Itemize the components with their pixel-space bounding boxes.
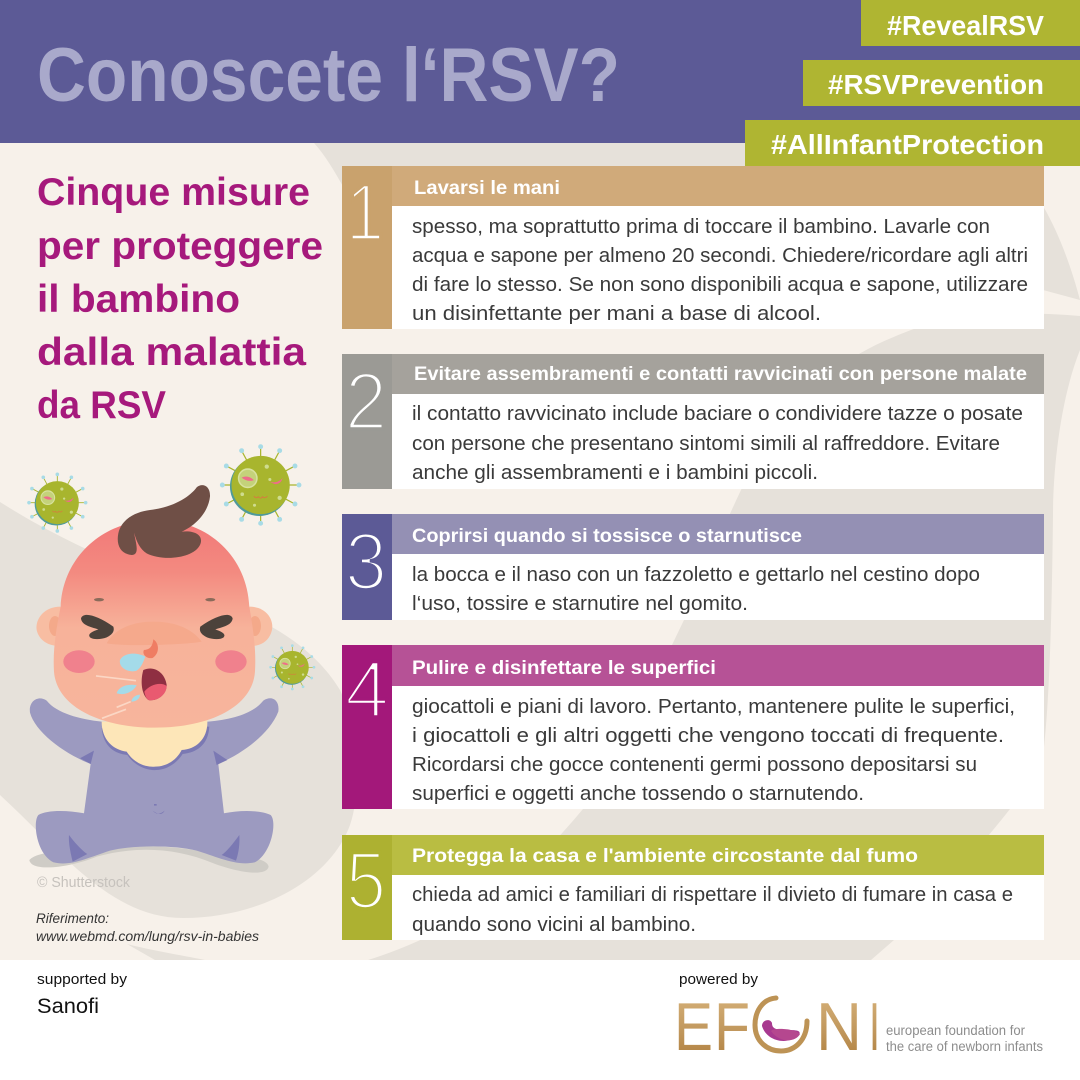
subheading: per proteggere	[37, 225, 323, 268]
EFCNI logo: the care of newborn infants	[886, 1039, 1043, 1054]
panel 4: clean surfaces: Ricordarsi che gocce contenenti germi possono depositarsi su	[412, 754, 977, 776]
subheading: dalla malattia	[37, 331, 306, 374]
bib	[102, 720, 209, 770]
title: Conoscete l‘RSV?	[37, 33, 620, 118]
supported by	[37, 971, 128, 1018]
powered by: powered by	[679, 971, 758, 988]
EFCNI logo: I	[869, 989, 880, 1065]
hair	[118, 485, 210, 558]
virus right	[269, 644, 315, 690]
panel 3: cover coughs: Coprirsi quando si tossisce o starnutisce	[412, 525, 802, 547]
virus top right	[220, 444, 301, 526]
head	[54, 520, 255, 728]
subheading	[37, 171, 323, 427]
panel 1: wash hands: acqua e sapone per almeno 20 secondi. Chiedere/ricordare agli altri	[412, 245, 1028, 267]
illustration: sick baby with viruses	[27, 444, 315, 873]
hashtag tags	[745, 0, 1080, 166]
ears	[36, 607, 272, 646]
hashtag tags: #AllInfantProtection	[771, 129, 1044, 160]
EFCNI logo: european foundation for	[886, 1023, 1025, 1038]
panel 4: clean surfaces: giocattoli e piani di lavoro. Pertanto, mantenere pulite le superfici,	[412, 696, 1015, 718]
EFCNI logo: N	[816, 989, 862, 1065]
panel 1: wash hands	[342, 166, 1044, 329]
EFCNI logo: E	[674, 989, 713, 1065]
hashtag tags: #RSVPrevention	[828, 69, 1044, 100]
EFCNI logo	[674, 989, 1043, 1065]
panel 1: wash hands: spesso, ma soprattutto prima di toccare il bambino. Lavarle con	[412, 216, 990, 238]
panel 2: avoid crowds	[342, 354, 1044, 489]
EFCNI logo: F	[714, 989, 750, 1065]
panel 4: clean surfaces: Pulire e disinfettare le superfici	[412, 657, 716, 679]
reference: Riferimento:	[36, 910, 109, 926]
footer	[0, 960, 1080, 1080]
panel 5: smoke free	[342, 835, 1044, 940]
panel 3: cover coughs	[342, 514, 1044, 620]
photo credit: © Shutterstock	[37, 875, 131, 891]
subheading: da RSV	[37, 384, 166, 427]
panel 2: avoid crowds: 2	[345, 357, 387, 447]
panel 5: smoke free: 5	[346, 836, 386, 926]
baby body	[30, 698, 279, 863]
panel 2: avoid crowds: il contatto ravvicinato include baciare o condividere tazze o posate	[412, 403, 1023, 425]
panel 1: wash hands: Lavarsi le mani	[414, 177, 560, 199]
panel 2: avoid crowds: Evitare assembramenti e contatti ravvicinati con persone malate	[414, 363, 1027, 385]
reference: www.webmd.com/lung/rsv-in-babies	[36, 928, 259, 944]
header band	[0, 0, 1080, 143]
panel 3: cover coughs: l‘uso, tossire e starnutire nel gomito.	[412, 593, 748, 615]
panel 1: wash hands: 1	[346, 168, 384, 258]
panel 1: wash hands: un disinfettante per mani a base di alcool.	[412, 303, 821, 325]
panel 5: smoke free: quando sono vicini al bambino.	[412, 914, 696, 936]
subheading: Cinque misure	[37, 171, 310, 214]
panel 4: clean surfaces: 4	[345, 645, 389, 735]
panel 2: avoid crowds: con persone che presentano sintomi simili al raffreddore. Evitare	[412, 433, 1000, 455]
supported by: supported by	[37, 971, 128, 988]
panel 4: clean surfaces	[342, 645, 1044, 809]
panel 1: wash hands: di fare lo stesso. Se non sono disponibili acqua e sapone, utilizzare	[412, 274, 1028, 296]
ground shadow	[29, 846, 269, 873]
panel 2: avoid crowds: anche gli assembramenti e i bambini piccoli.	[412, 462, 818, 484]
hashtag tags: #RevealRSV	[887, 10, 1044, 41]
panel 5: smoke free: Protegga la casa e l'ambiente circostante dal fumo	[412, 845, 918, 867]
subheading: il bambino	[37, 278, 240, 321]
panel 3: cover coughs: 3	[345, 517, 387, 607]
panel 3: cover coughs: la bocca e il naso con un fazzoletto e gettarlo nel cestino dopo	[412, 564, 980, 586]
panel 4: clean surfaces: superfici e oggetti anche tossendo o starnutendo.	[412, 783, 864, 805]
supported by: Sanofi	[37, 995, 99, 1018]
panel 5: smoke free: chieda ad amici e familiari di rispettare il divieto di fumare in casa e	[412, 884, 1013, 906]
virus left	[27, 473, 87, 533]
panel 4: clean surfaces: i giocattoli e gli altri oggetti che vengono toccati di frequente.	[412, 725, 1004, 747]
face	[63, 598, 247, 718]
reference	[36, 910, 259, 944]
